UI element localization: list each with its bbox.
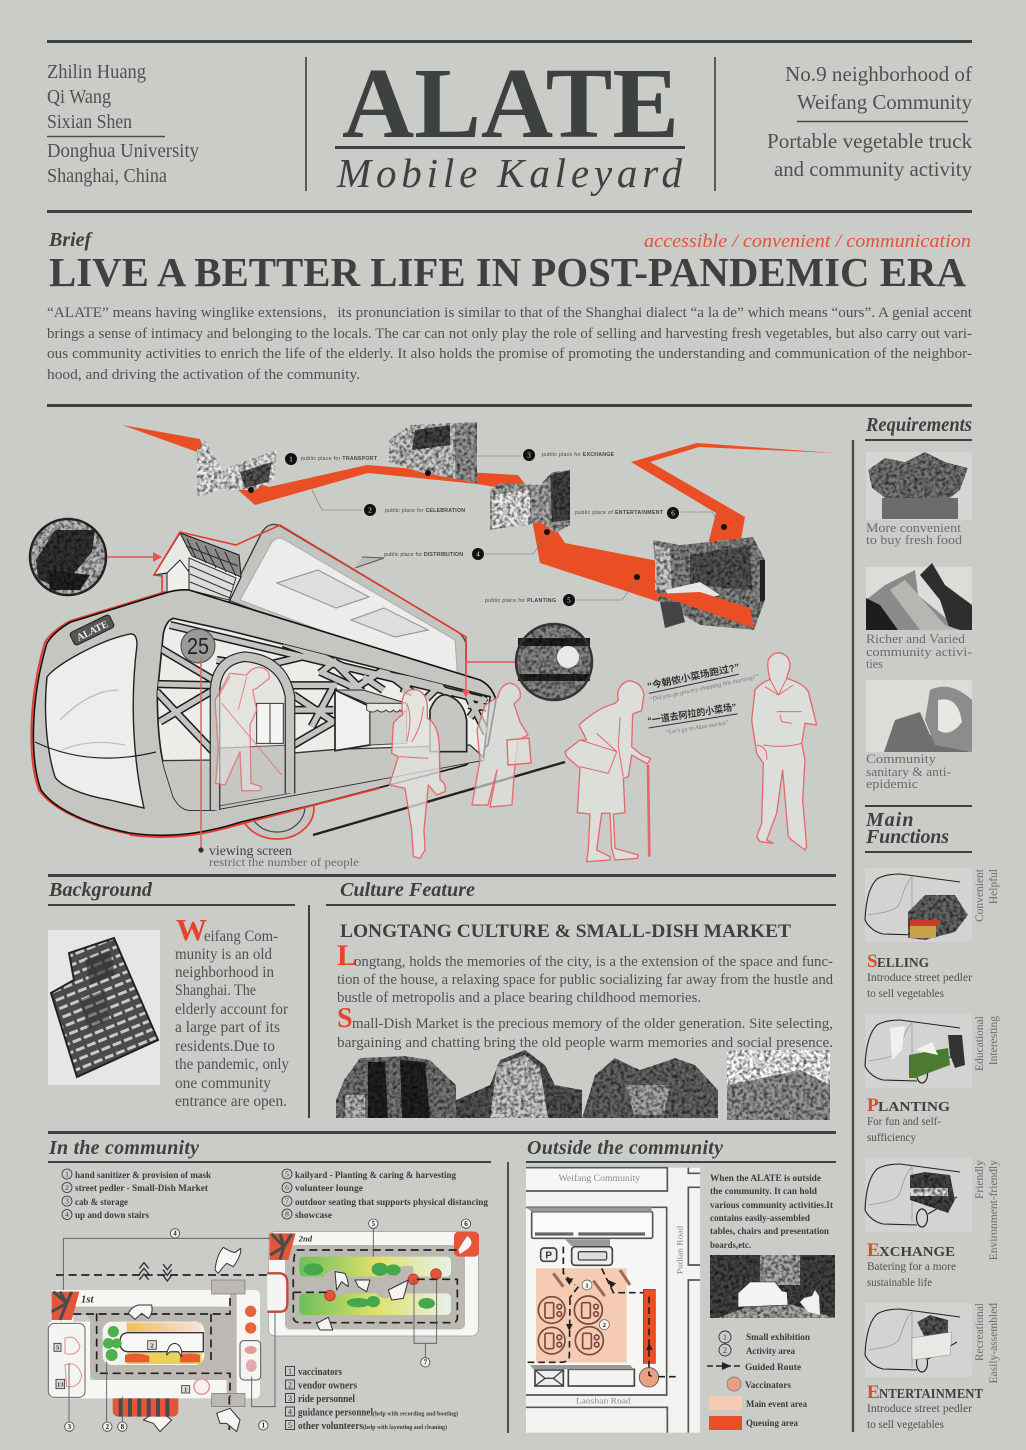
labels for public places: 2 bbox=[368, 506, 372, 514]
outside description: tables, chairs and presentation bbox=[710, 1226, 830, 1237]
personnel legend: 2 bbox=[288, 1380, 292, 1390]
background text: neighborhood in bbox=[175, 964, 274, 981]
dialogue in Shanghai dialect: “一道去阿拉的小菜场” bbox=[647, 701, 738, 727]
function: exchange: sustainable life bbox=[867, 1277, 932, 1289]
heading: Culture Feature bbox=[340, 879, 475, 901]
title rule bbox=[335, 146, 685, 149]
site map bbox=[526, 1168, 700, 1433]
vaccinator point bbox=[639, 1368, 659, 1387]
functional legend: 4 bbox=[65, 1210, 69, 1219]
small house bbox=[154, 533, 241, 602]
caption: sanitary bbox=[866, 752, 951, 791]
background text: residents.Due to bbox=[175, 1038, 275, 1055]
floor plans: 1 bbox=[262, 1422, 266, 1430]
function: entertainment: NTERTAINMENT bbox=[879, 1386, 983, 1401]
site map: Weifang Community bbox=[558, 1173, 641, 1184]
figure: person inside truck bbox=[215, 667, 282, 791]
background text: munity is an old bbox=[175, 946, 272, 963]
site map: 1 bbox=[585, 1282, 589, 1289]
labels for public places: public place for EXCHANGE bbox=[542, 452, 615, 458]
functional legend: 8 bbox=[285, 1210, 289, 1218]
function: entertainment: Easily-assembled bbox=[988, 1303, 1000, 1383]
functional legend: hand sanitizer & provision of mask bbox=[75, 1171, 212, 1181]
map legend: Guided Route bbox=[745, 1362, 802, 1373]
heading: Functions bbox=[865, 826, 949, 848]
panel: requirements bbox=[865, 415, 972, 791]
route markers bbox=[248, 470, 727, 580]
personnel legend: guidance personnel bbox=[298, 1408, 373, 1418]
project description: Portable vegetable truck bbox=[767, 129, 972, 153]
labels for public places: public place of ENTERTAINMENT bbox=[575, 510, 664, 516]
heading: Requirements bbox=[865, 415, 972, 436]
orange ribbon bbox=[122, 425, 758, 630]
labels for public places: 4 bbox=[476, 550, 480, 558]
figure: woman with long hair bbox=[389, 689, 445, 858]
detail photo: roof eaves bbox=[29, 518, 162, 596]
brief paragraph: “ALATE” means having winglike extensions，its pronunciation is similar to that of the Shanghai dialect “a la de” which means “ours”. A genial accent bbox=[47, 305, 972, 321]
functional legend bbox=[62, 1169, 488, 1221]
culture text: S bbox=[337, 1003, 353, 1034]
authors: Zhilin Huang bbox=[47, 61, 146, 83]
brief paragraph: hood, and driving the activation of the community. bbox=[47, 367, 360, 383]
queuing area bbox=[643, 1289, 655, 1363]
function: selling: to sell vegetables bbox=[867, 988, 945, 1000]
mobile kaleyard truck illustration bbox=[29, 518, 817, 869]
seating tables bbox=[538, 1296, 603, 1355]
function: selling: S bbox=[867, 951, 878, 972]
function: exchange: XCHANGE bbox=[879, 1244, 955, 1259]
outside description: the community. It can hold bbox=[710, 1186, 818, 1197]
second floor plan bbox=[267, 1232, 479, 1336]
personnel legend: vaccinators bbox=[298, 1367, 342, 1378]
sign: 25: 25 bbox=[187, 633, 209, 659]
heading: Background bbox=[48, 879, 153, 901]
heading bbox=[865, 809, 949, 848]
ground line bbox=[313, 762, 565, 835]
map legend: 2 bbox=[723, 1346, 727, 1355]
guided routes bbox=[56, 1250, 457, 1430]
function: planting: sufficiency bbox=[867, 1132, 916, 1144]
site map: Pudian Road bbox=[675, 1225, 685, 1274]
floor labels: 1st bbox=[81, 1294, 94, 1305]
function: exchange: Batering for a more bbox=[867, 1261, 956, 1273]
functional legend: 2 bbox=[65, 1183, 69, 1192]
floor plans: 6 bbox=[464, 1220, 468, 1228]
personnel legend: ride personnel bbox=[298, 1394, 355, 1405]
main event area bbox=[536, 1268, 627, 1363]
image: thumbs up bbox=[866, 563, 972, 630]
map legend: Queuing area bbox=[746, 1418, 798, 1429]
function: entertainment: E bbox=[867, 1382, 880, 1403]
floor plans bbox=[48, 1219, 479, 1432]
panel: main functions bbox=[865, 806, 1000, 1431]
visitor figures bbox=[128, 1247, 408, 1432]
personnel legend: 1 bbox=[288, 1367, 292, 1376]
figure: shopper with bag bbox=[472, 683, 531, 807]
background text: a large part of its bbox=[175, 1019, 280, 1036]
function: entertainment: to sell vegetables bbox=[867, 1419, 945, 1431]
map legend: Vaccinators bbox=[745, 1380, 791, 1391]
site map: Laoshan Road bbox=[576, 1395, 632, 1405]
functional legend: 3 bbox=[65, 1196, 69, 1206]
sign: 25 bbox=[181, 629, 215, 663]
authors: Sixian Shen bbox=[47, 111, 132, 133]
side opening with lattice, detailed at 3x bbox=[157, 618, 490, 858]
project description: No.9 neighborhood of bbox=[785, 62, 972, 86]
brief label: Brief bbox=[48, 229, 94, 251]
floor plans: 4 bbox=[173, 1230, 177, 1238]
route ribbon with public places bbox=[122, 422, 834, 630]
authors bbox=[47, 61, 199, 187]
floor plans: 2 bbox=[150, 1342, 154, 1349]
heading: Outside the community bbox=[527, 1137, 723, 1159]
culture text: L bbox=[337, 939, 357, 972]
caption: sanitary: sanitary & anti- bbox=[866, 765, 951, 779]
project description bbox=[767, 62, 972, 181]
culture text: bargaining and chatting bring the old people warm memories and social presence. bbox=[337, 1035, 833, 1051]
red contour bbox=[154, 525, 466, 692]
upper shell bbox=[228, 524, 466, 692]
caption: more convenient: to buy fresh food bbox=[866, 533, 962, 547]
floor plans: 1 bbox=[184, 1387, 187, 1394]
labels for public places: 3 bbox=[527, 452, 531, 460]
labels for public places: public place for TRANSPORT bbox=[301, 456, 378, 462]
labels for public places: public place for PLANTING bbox=[485, 598, 556, 604]
background text: W bbox=[176, 912, 207, 947]
functional legend: kailyard - Planting & caring & harvesting bbox=[295, 1171, 456, 1181]
function: selling: Convenient bbox=[974, 868, 986, 922]
outside description bbox=[710, 1173, 834, 1251]
figure: elderly woman with cane bbox=[565, 681, 651, 862]
personnel legend: (help with recording and booting) bbox=[373, 1410, 458, 1418]
truck body bbox=[33, 590, 496, 835]
orange ribbon right arm bbox=[631, 443, 834, 552]
personnel legend: (help with layouting and cleaning) bbox=[363, 1424, 447, 1431]
dialogue in Shanghai dialect: “Let's go to Alate market” bbox=[665, 719, 730, 736]
authors: Donghua University bbox=[47, 140, 199, 162]
tagline: accessible / convenient / communication bbox=[644, 231, 971, 252]
background text: one community bbox=[175, 1075, 271, 1092]
map legend: Small exhibition bbox=[746, 1332, 811, 1343]
wheel bbox=[240, 777, 314, 839]
detail photo: lattice shade bbox=[462, 623, 593, 701]
authors: Qi Wang bbox=[47, 86, 111, 108]
image: sanitizing hands bbox=[866, 680, 972, 752]
function: exchange bbox=[865, 1158, 1000, 1289]
labels for public places: 5 bbox=[567, 596, 571, 604]
culture text: tion of the house, a relaxing space for public socializing far away from the hustle and bbox=[337, 972, 833, 988]
panel: culture feature bbox=[326, 879, 836, 1120]
truck body red outline bbox=[31, 592, 241, 836]
project description: and community activity bbox=[774, 157, 972, 181]
personnel legend bbox=[286, 1366, 458, 1432]
photo: planting wall bbox=[653, 537, 765, 630]
background text: eifang Com- bbox=[204, 928, 278, 945]
function: planting: Educational bbox=[974, 1016, 986, 1071]
functional legend: up and down stairs bbox=[75, 1211, 149, 1221]
title: ALATE: ALATE bbox=[342, 47, 679, 159]
background text: entrance are open. bbox=[175, 1093, 287, 1110]
floor plans: 3 bbox=[68, 1423, 72, 1431]
showcase stripes bbox=[113, 1398, 178, 1417]
floor plans: 2 bbox=[106, 1423, 110, 1431]
caption: more convenient bbox=[866, 521, 962, 547]
functional legend: 6 bbox=[285, 1183, 289, 1192]
panel: outside the community bbox=[526, 1137, 836, 1433]
floor plans: 5 bbox=[56, 1345, 60, 1352]
route bbox=[526, 1247, 677, 1377]
dialogue in Shanghai dialect: “Did you go grocery shopping this morning?” bbox=[649, 673, 760, 703]
function: planting: For fun and self- bbox=[867, 1116, 941, 1128]
personnel legend: other volunteers bbox=[298, 1421, 363, 1432]
caption: sanitary: epidemic bbox=[866, 777, 919, 791]
map legend: Main event area bbox=[746, 1399, 807, 1410]
subtitle: Mobile Kaleyard: Mobile Kaleyard bbox=[336, 150, 682, 196]
floor bbox=[157, 745, 487, 812]
aerial site map bbox=[48, 930, 160, 1085]
floor plans: 2nd bbox=[298, 1234, 313, 1244]
labels for public places: 1 bbox=[289, 456, 293, 464]
caption: richer activities bbox=[866, 632, 972, 671]
background text: Shanghai. The bbox=[175, 982, 256, 999]
logo badge bbox=[69, 614, 115, 646]
personnel legend: vendor owners bbox=[298, 1380, 357, 1392]
dialogue in Shanghai dialect bbox=[645, 657, 760, 739]
personnel legend: 3 bbox=[288, 1394, 292, 1403]
labels for public places: 6 bbox=[671, 510, 675, 518]
labels for public places: public place for CELEBRATION bbox=[385, 508, 465, 514]
figures: elderly woman and standing man, detailed at 3x bbox=[565, 653, 817, 862]
floor plans: 8 bbox=[121, 1423, 125, 1431]
figure: standing man bbox=[752, 653, 817, 850]
functional legend: 5 bbox=[285, 1170, 289, 1178]
image: vegetable crate bbox=[866, 452, 972, 520]
function: selling: Helpful bbox=[988, 869, 1000, 904]
personnel legend: 5 bbox=[288, 1421, 292, 1430]
leader lines bbox=[312, 456, 720, 600]
function: exchange: Friendly bbox=[974, 1160, 986, 1199]
stair arrows bbox=[139, 1263, 172, 1281]
caption: sanitary: Community bbox=[866, 752, 937, 766]
functional legend: 1 bbox=[65, 1170, 69, 1178]
functional legend: street pedler - Small-Dish Market bbox=[75, 1184, 209, 1194]
caption: richer activities: Richer and Varied bbox=[866, 632, 965, 646]
caption: richer activities: community activi- bbox=[866, 645, 972, 659]
caption: richer activities: ties bbox=[866, 657, 883, 671]
header band bbox=[47, 42, 972, 212]
shop window and awning bbox=[335, 690, 407, 751]
dialogue in Shanghai dialect: “今朝侬小菜场跑过?” bbox=[646, 661, 741, 692]
culture text: bustle of metropolis and a place bearing childhood memories. bbox=[337, 990, 701, 1006]
function: selling: Introduce street pedler bbox=[867, 972, 972, 984]
function: entertainment: Recreational bbox=[974, 1303, 986, 1361]
second arch bbox=[430, 695, 467, 752]
culture text bbox=[337, 939, 833, 1051]
function: planting: LANTING bbox=[878, 1099, 951, 1114]
logo badge: ALATE bbox=[75, 619, 111, 644]
map legend: Activity area bbox=[746, 1346, 795, 1357]
background text bbox=[175, 912, 289, 1110]
heading: Main bbox=[865, 809, 914, 831]
brief section bbox=[47, 229, 972, 406]
connector lines and callouts bbox=[63, 1228, 437, 1422]
first floor plan bbox=[48, 1280, 261, 1407]
viewing screen callout bbox=[198, 658, 359, 869]
caption: more convenient: More convenient bbox=[866, 521, 962, 535]
function: planting: P bbox=[867, 1095, 879, 1116]
culture text: mall-Dish Market is the precious memory of the older generation. Site selecting, bbox=[352, 1016, 833, 1032]
floor plans: 5 bbox=[372, 1220, 376, 1228]
subheading: LONGTANG CULTURE & SMALL-DISH MARKET bbox=[340, 922, 792, 942]
function: planting: Interesting bbox=[988, 1016, 1000, 1065]
headline: LIVE A BETTER LIFE IN POST-PANDEMIC ERA bbox=[49, 249, 966, 295]
photo: transport bbox=[197, 440, 277, 497]
panel: background bbox=[48, 879, 295, 1110]
functional legend: cab & storage bbox=[75, 1198, 128, 1208]
photo: truck in street bbox=[710, 1255, 835, 1318]
site map: 2 bbox=[603, 1322, 607, 1329]
heading: In the community bbox=[48, 1137, 199, 1159]
function: selling: ELLING bbox=[877, 955, 929, 970]
culture text: ongtang, holds the memories of the city, is a the extension of the space and func- bbox=[354, 954, 833, 970]
outside description: boards,etc. bbox=[710, 1240, 751, 1251]
background text: the pandemic, only bbox=[175, 1056, 289, 1073]
floor plans: 7 bbox=[424, 1359, 428, 1367]
background text: elderly account for bbox=[175, 1001, 289, 1018]
opening bbox=[157, 618, 490, 810]
site map: P bbox=[545, 1251, 552, 1262]
functional legend: outdoor seating that supports physical distancing bbox=[295, 1198, 488, 1208]
market photos bbox=[336, 1050, 830, 1120]
labels for public places: public place for DISTRIBUTION bbox=[384, 552, 463, 558]
lattice beams bbox=[157, 625, 487, 752]
viewing screen callout: viewing screen bbox=[209, 843, 292, 858]
arched door bbox=[215, 657, 290, 810]
function: exchange: E bbox=[867, 1240, 880, 1261]
function: exchange: Environment-friendly bbox=[988, 1160, 1000, 1260]
function: selling bbox=[865, 868, 1000, 1000]
photo: exchange bbox=[389, 422, 477, 483]
panel: in the community bbox=[48, 1137, 508, 1433]
functional legend: volunteer lounge bbox=[295, 1184, 363, 1194]
authors: Shanghai, China bbox=[47, 165, 167, 187]
outside description: contains easily-assembled bbox=[710, 1213, 811, 1224]
function: entertainment: Introduce street pedler bbox=[867, 1403, 972, 1415]
map legend bbox=[707, 1331, 811, 1430]
red lower edge bbox=[130, 788, 380, 837]
functional legend: showcase bbox=[295, 1211, 332, 1221]
function: planting bbox=[865, 1014, 1000, 1144]
windshield bbox=[46, 634, 144, 808]
floor plans: 13 bbox=[57, 1382, 64, 1389]
map legend: 1 bbox=[723, 1333, 727, 1342]
function: entertainment bbox=[865, 1303, 1000, 1431]
project description: Weifang Community bbox=[797, 90, 972, 114]
labels for public places bbox=[285, 449, 679, 606]
outside description: When the ALATE is outside bbox=[710, 1173, 822, 1184]
role markers bbox=[54, 1341, 190, 1393]
brief paragraph bbox=[47, 305, 972, 383]
photo: entertainment bbox=[490, 470, 570, 533]
functional legend: 7 bbox=[285, 1196, 289, 1206]
brief paragraph: ous community activities to enrich the life of the elderly. It also holds the promise of promoting the understanding and communication of the neighbor- bbox=[47, 346, 972, 362]
viewing screen callout: restrict the number of people bbox=[209, 855, 359, 869]
personnel legend: 4 bbox=[288, 1408, 292, 1416]
brief paragraph: brings a sense of intimacy and belonging to the locals. The car can not only play the role of selling and harvesting fresh vegetables, but also carry out vari- bbox=[47, 326, 972, 342]
outside description: various community activities.It bbox=[710, 1200, 834, 1211]
